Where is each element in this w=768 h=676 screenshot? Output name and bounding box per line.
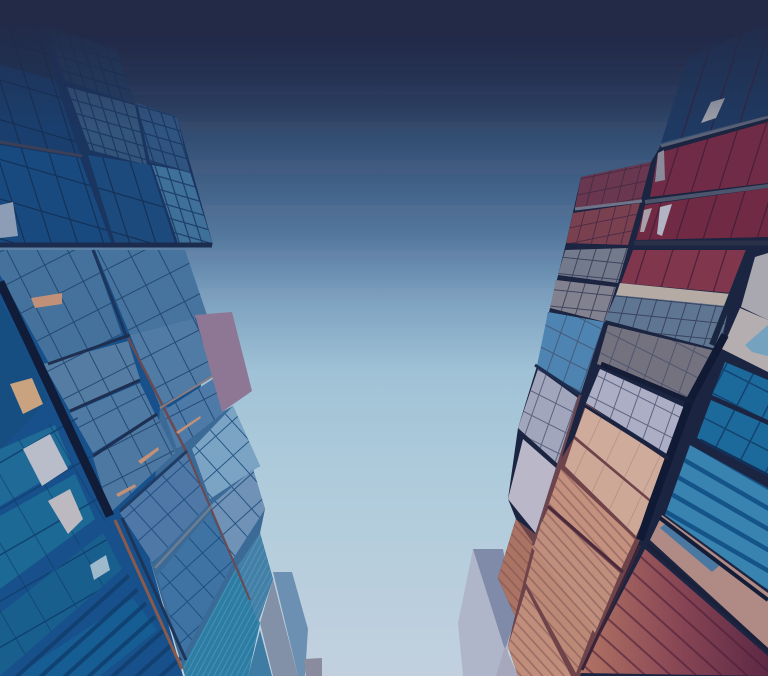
underlay for lower right edge of left stack (150, 406, 273, 676)
distant white container (458, 549, 518, 676)
black corner spine and rust posts (0, 282, 250, 669)
rust underlay between peach containers (498, 403, 665, 676)
pink container (195, 312, 252, 412)
upper left containers, dark top rows (0, 25, 213, 247)
label: tan placard (10, 378, 43, 414)
blue and red containers beside the right spine (580, 362, 768, 676)
blue and grey mid containers (508, 312, 720, 536)
left container stack (0, 25, 322, 676)
right container stack (458, 23, 768, 676)
label: white placard upper (23, 434, 68, 486)
upper dark and red containers (550, 23, 768, 372)
dark navy fade over the top of the picture (0, 0, 768, 130)
peach corrugated containers (498, 406, 665, 676)
shadow base behind right stack (498, 115, 768, 676)
dark right spine and rust posts (533, 250, 768, 670)
teal blue containers left of the spine (0, 300, 182, 676)
middle left grid containers (0, 250, 322, 676)
spine-side base of the left stack (0, 250, 205, 676)
orange accent stripes on left panels (31, 293, 201, 497)
label: white placard lower (48, 489, 83, 534)
